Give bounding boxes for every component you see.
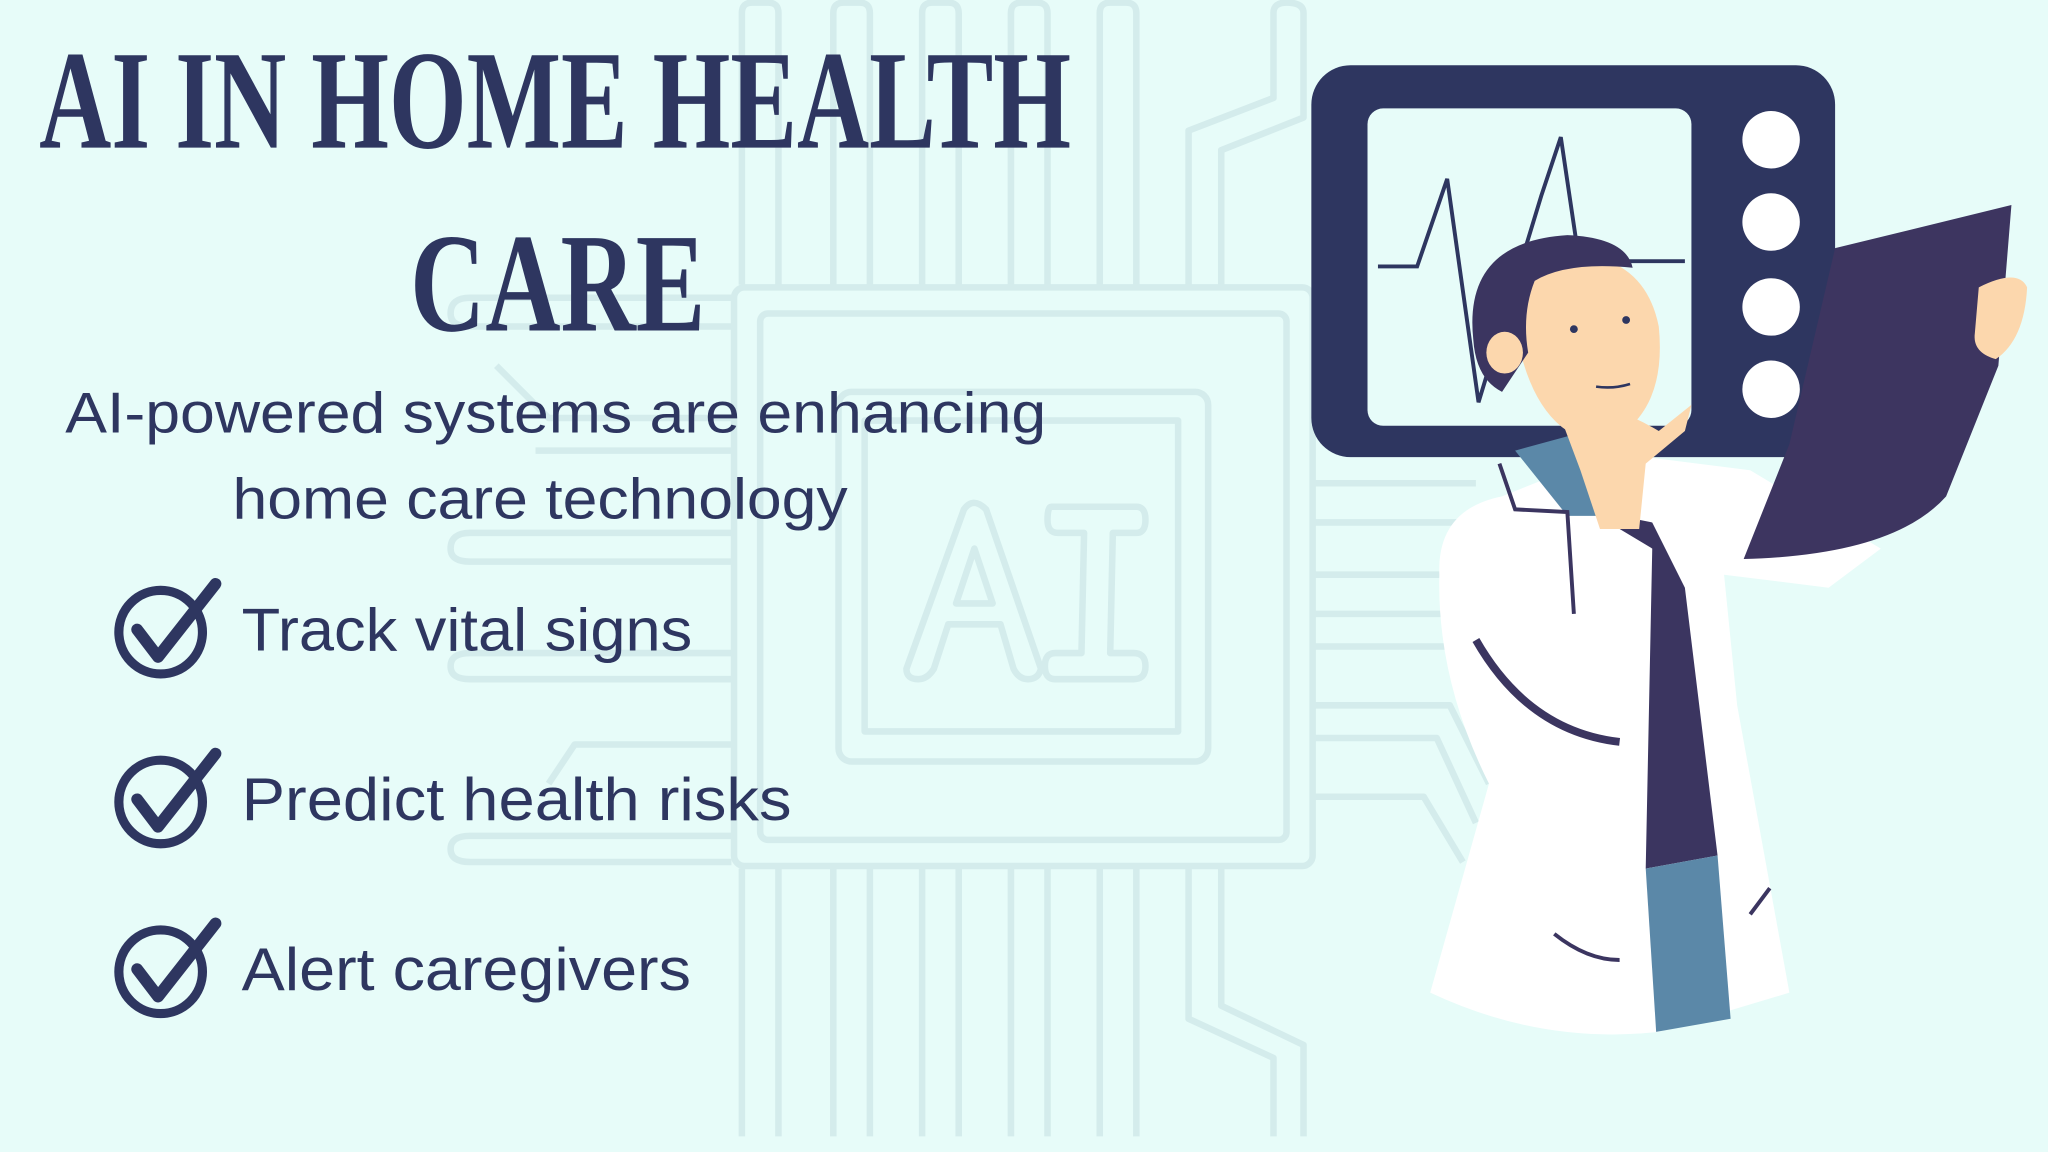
circuit background	[451, 3, 1489, 1136]
bullet: Track vital signs	[119, 584, 692, 674]
monitor	[1311, 65, 1835, 457]
AI outline letters	[906, 503, 1145, 679]
title: CARE	[410, 204, 705, 361]
title	[39, 22, 1071, 361]
subtitle: AI-powered systems are enhancing	[65, 381, 1046, 445]
bullet: Alert caregivers	[119, 923, 691, 1014]
bullet: Predict health risks: Predict health risks	[242, 766, 792, 833]
icon: check	[119, 754, 216, 844]
title: AI IN HOME HEALTH	[39, 22, 1071, 179]
bullet: Predict health risks	[119, 754, 792, 844]
icon: check	[119, 584, 216, 674]
bullet: Track vital signs: Track vital signs	[242, 596, 692, 663]
subtitle: home care technology	[232, 468, 848, 532]
subtitle	[65, 381, 1046, 532]
illustration: doctor	[1430, 205, 2027, 1034]
bullet: Alert caregivers: Alert caregivers	[242, 936, 691, 1003]
icon: check	[119, 923, 216, 1014]
